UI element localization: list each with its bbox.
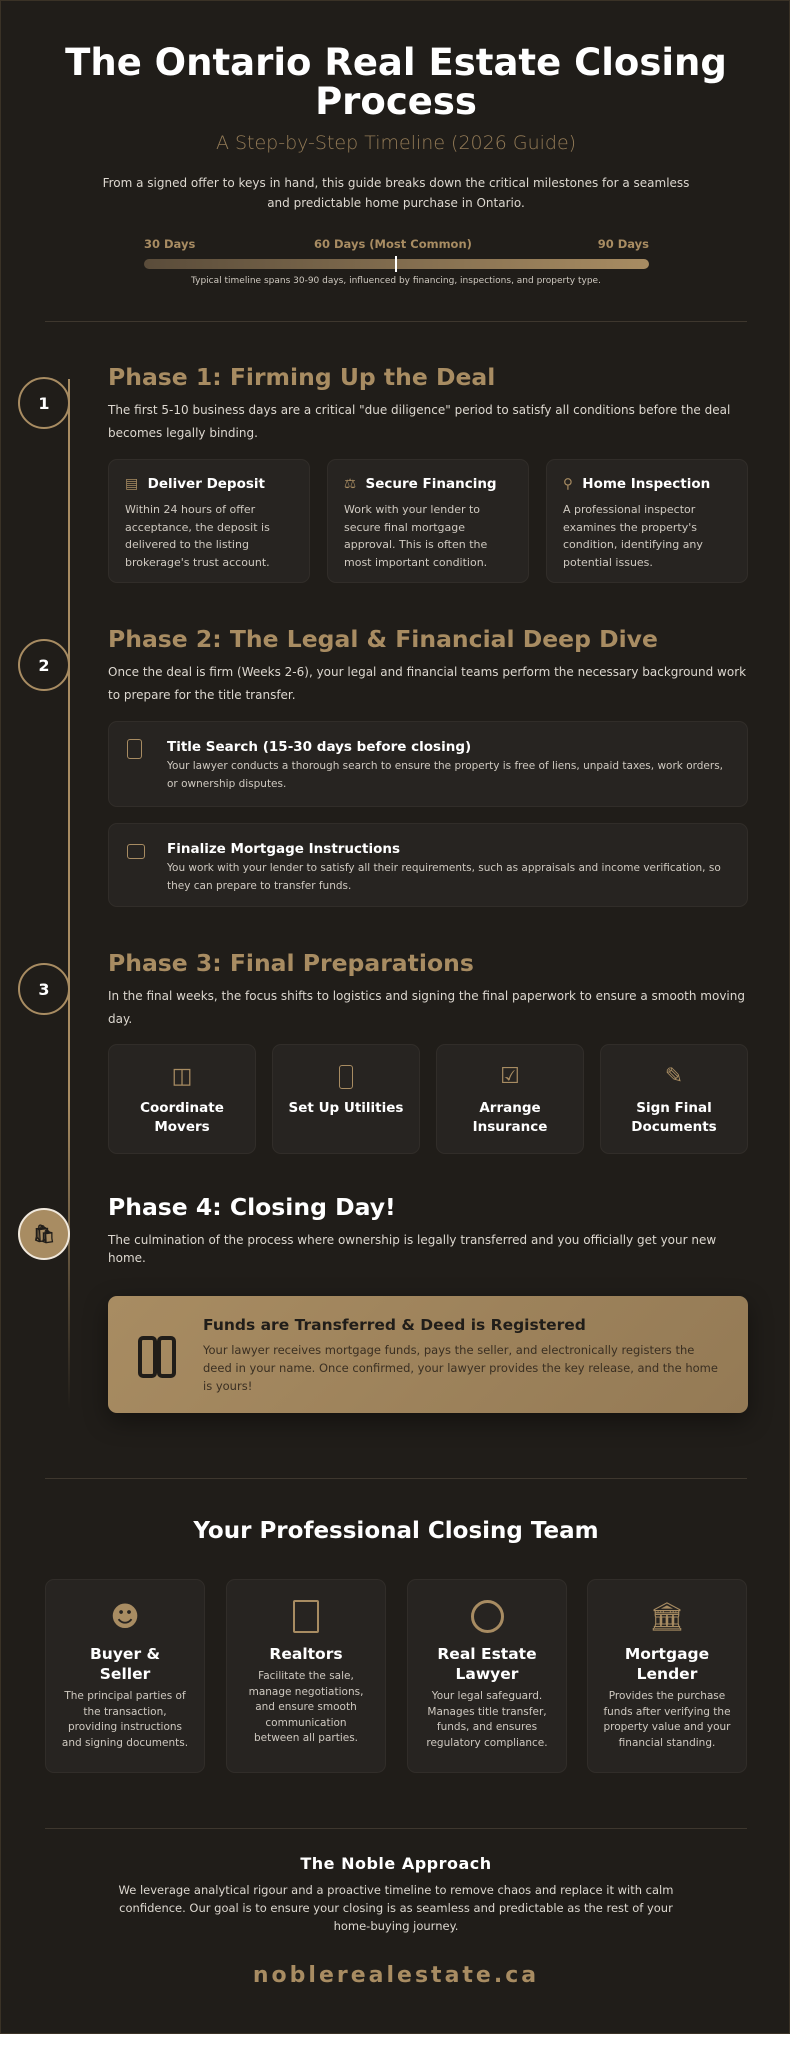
phase 2 marker: 2 xyxy=(38,656,50,674)
team card: lender: Provides the purchase funds after verifying the property value and your financial standing. xyxy=(603,1690,731,1748)
card: deliver deposit: Within 24 hours of offer acceptance, the deposit is delivered to the listing brokerage's trust account. xyxy=(125,503,270,568)
card: secure financing xyxy=(327,459,529,583)
card: sign documents: Documents xyxy=(631,1119,717,1135)
icon: ticket xyxy=(138,1336,176,1378)
title xyxy=(65,41,727,123)
team heading: Your Professional Closing Team xyxy=(193,1518,599,1544)
subtitle: A Step-by-Step Timeline (2026 Guide) xyxy=(216,132,576,154)
team card: lawyer: Real Estate xyxy=(437,1645,537,1663)
card: insurance: Arrange xyxy=(479,1100,541,1116)
phase 4 marker: 🛍 xyxy=(33,1224,55,1244)
intro text: From a signed offer to keys in hand, this guide breaks down the critical milestones for a seamless and predictable home purchase in Ontario. xyxy=(103,176,689,210)
card: secure financing: Work with your lender to secure final mortgage approval. This is often the most important condition. xyxy=(344,503,487,568)
website url: noblerealestate.ca xyxy=(253,1963,539,1988)
card: utilities: Set Up Utilities xyxy=(289,1100,403,1116)
card: movers: ◫ xyxy=(172,1064,192,1089)
team card: lawyer xyxy=(407,1579,567,1773)
team card: lender: Lender xyxy=(637,1665,697,1683)
card: title search: Title Search (15-30 days before closing) xyxy=(167,739,471,755)
phase 1 marker: 1 xyxy=(38,394,50,412)
timeline bar: 90 Days xyxy=(598,237,649,251)
timeline bar xyxy=(144,237,649,272)
team card: buyer & seller: Buyer & xyxy=(90,1645,160,1663)
phase 4 description: The culmination of the process where ownership is legally transferred and you officially get your new home. xyxy=(108,1233,716,1265)
team card: buyer & seller: ☻ xyxy=(110,1600,140,1633)
callout: funds transferred: Funds are Transferred & Deed is Registered xyxy=(203,1316,586,1334)
card: movers: Coordinate xyxy=(140,1100,224,1116)
team card: lender: Mortgage xyxy=(625,1645,709,1663)
card: insurance: ☑ xyxy=(500,1064,520,1089)
card: sign documents: ✎ xyxy=(665,1064,683,1089)
team card: realtors: Realtors xyxy=(269,1645,343,1663)
card: movers: Movers xyxy=(154,1119,210,1135)
card: secure financing: ⚖ Secure Financing xyxy=(344,476,497,492)
callout: funds transferred xyxy=(108,1296,748,1413)
card: title search xyxy=(108,721,748,807)
team card: buyer & seller: Seller xyxy=(100,1665,150,1683)
team card: buyer & seller: The principal parties of the transaction, providing instructions and signing documents. xyxy=(62,1690,188,1748)
icon: document xyxy=(127,739,142,759)
callout: funds transferred: Your lawyer receives mortgage funds, pays the seller, and electronically registers the deed in your name. Once confirmed, your lawyer provides the key release, and the home is yours! xyxy=(203,1343,718,1393)
vertical timeline line xyxy=(68,379,70,1409)
phase 2 description: Once the deal is firm (Weeks 2-6), your legal and financial teams perform the necessary background work to prepare for the title transfer. xyxy=(108,665,746,702)
card: title search: Your lawyer conducts a thorough search to ensure the property is free of liens, unpaid taxes, work orders, or ownership disputes. xyxy=(167,760,723,790)
phase 1 description: The first 5-10 business days are a critical "due diligence" period to satisfy all conditions before the deal becomes legally binding. xyxy=(108,403,730,440)
phase 3 description: In the final weeks, the focus shifts to logistics and signing the final paperwork to ensure a smooth moving day. xyxy=(108,989,745,1026)
phase 3 marker: 3 xyxy=(38,980,50,998)
card: sign documents xyxy=(600,1044,748,1154)
team card: lawyer: Your legal safeguard. Manages title transfer, funds, and ensures regulatory compliance. xyxy=(426,1690,548,1748)
timeline bar: 60 Days (Most Common) xyxy=(314,237,472,251)
team card: realtors xyxy=(226,1579,386,1773)
card: utilities xyxy=(272,1044,420,1154)
card: movers xyxy=(108,1044,256,1154)
card: home inspection xyxy=(546,459,748,583)
card: home inspection: ⚲ Home Inspection xyxy=(563,476,710,492)
phase 4 heading: Phase 4: Closing Day! xyxy=(108,1193,396,1221)
phase 1 heading: Phase 1: Firming Up the Deal xyxy=(108,363,495,391)
card: mortgage instructions: Finalize Mortgage Instructions xyxy=(167,841,400,857)
card: deliver deposit: ▤ Deliver Deposit xyxy=(125,476,265,492)
title: The Ontario Real Estate Closing xyxy=(65,41,727,84)
card: insurance: Insurance xyxy=(473,1119,547,1135)
card: deliver deposit xyxy=(108,459,310,583)
noble approach heading: The Noble Approach xyxy=(300,1854,492,1873)
card: home inspection: A professional inspector examines the property's condition, identifying any potential issues. xyxy=(563,503,703,568)
card: mortgage instructions xyxy=(108,823,748,907)
team card: lawyer: Lawyer xyxy=(456,1665,518,1683)
phase 3 marker xyxy=(18,963,70,1015)
card: insurance xyxy=(436,1044,584,1154)
phase 3 heading: Phase 3: Final Preparations xyxy=(108,949,474,977)
icon: money xyxy=(127,844,145,859)
card: mortgage instructions: You work with your lender to satisfy all their requirements, such as appraisals and income verification, so they can prepare to transfer funds. xyxy=(167,862,721,892)
title: Process xyxy=(315,80,477,123)
noble approach text: We leverage analytical rigour and a proactive timeline to remove chaos and replace it with calm confidence. Our goal is to ensure your closing is as seamless and predictable as the rest of your home-buying journey. xyxy=(119,1883,673,1933)
timeline caption: Typical timeline spans 30-90 days, influenced by financing, inspections, and property type. xyxy=(191,276,601,286)
timeline bar: 30 Days xyxy=(144,237,195,251)
phase 2 marker xyxy=(18,639,70,691)
card: sign documents: Sign Final xyxy=(636,1100,712,1116)
phase 1 marker xyxy=(18,377,70,429)
team card: lender: 🏛 xyxy=(649,1600,685,1633)
team card: lender xyxy=(587,1579,747,1773)
team card: realtors: Facilitate the sale, manage negotiations, and ensure smooth communication between all parties. xyxy=(249,1670,363,1744)
team card: buyer & seller xyxy=(45,1579,205,1773)
phase 4 marker xyxy=(18,1208,70,1260)
phase 2 heading: Phase 2: The Legal & Financial Deep Dive xyxy=(108,625,658,653)
